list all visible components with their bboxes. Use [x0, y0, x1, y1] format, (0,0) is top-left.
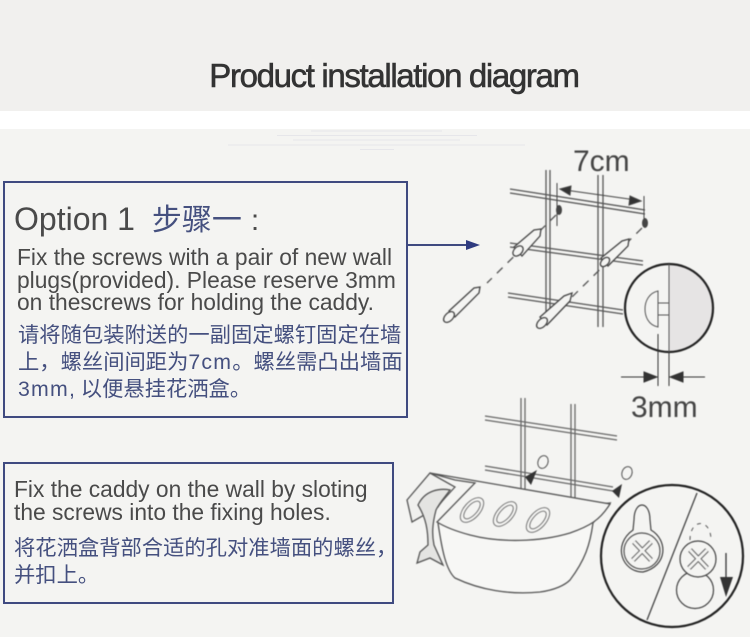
step one Chinese text — [18, 323, 403, 401]
faint fine print lines — [228, 130, 525, 150]
diagram: wall screws — [442, 145, 715, 424]
step one English text: Fix the screws with a pair of new wall — [17, 244, 392, 270]
white divider strip — [0, 111, 750, 129]
detail circle — [625, 264, 713, 352]
arrow: step one to diagram — [408, 240, 480, 250]
step one English text — [17, 244, 396, 315]
title: Product installation diagram — [209, 57, 579, 94]
panel: step two — [3, 462, 394, 604]
wall grid — [508, 170, 645, 327]
step two English text: the screws into the fixing holes. — [14, 499, 331, 525]
drilled holes — [556, 205, 648, 228]
step one English text: on thescrews for holding the caddy. — [17, 289, 374, 315]
wall plugs — [511, 229, 629, 268]
screws — [525, 454, 634, 498]
caddy body — [407, 473, 610, 593]
dimension 7cm arrow — [557, 183, 644, 226]
diagram: caddy on wall — [406, 398, 745, 629]
step one Chinese text: 请将随包装附送的一副固定螺钉固定在墙 — [18, 323, 401, 347]
step one heading: Option 1 步骤一 : — [14, 201, 259, 237]
step one Chinese text: 上，螺丝间间距为7cm。螺丝需凸出墙面 — [18, 350, 403, 374]
loose screws — [442, 287, 572, 330]
panel: step one — [3, 181, 408, 418]
step two Chinese text — [14, 536, 397, 587]
dimension 3mm arrows — [621, 334, 705, 386]
step one English text: plugs(provided). Please reserve 3mm — [17, 266, 396, 292]
step two English text — [14, 476, 368, 525]
label 3mm: 3mm — [631, 391, 698, 424]
step two Chinese text: 将花洒盒背部合适的孔对准墙面的螺丝， — [14, 536, 397, 560]
wall grid — [485, 398, 617, 500]
step one Chinese text: 3mm, 以便悬挂花洒盒。 — [18, 377, 251, 401]
step two English text: Fix the caddy on the wall by sloting — [14, 476, 368, 502]
detail circle — [601, 485, 743, 627]
step two Chinese text: 并扣上。 — [14, 563, 99, 587]
label 7cm: 7cm — [573, 145, 630, 178]
top band — [0, 0, 750, 111]
dashed guides — [487, 215, 642, 298]
